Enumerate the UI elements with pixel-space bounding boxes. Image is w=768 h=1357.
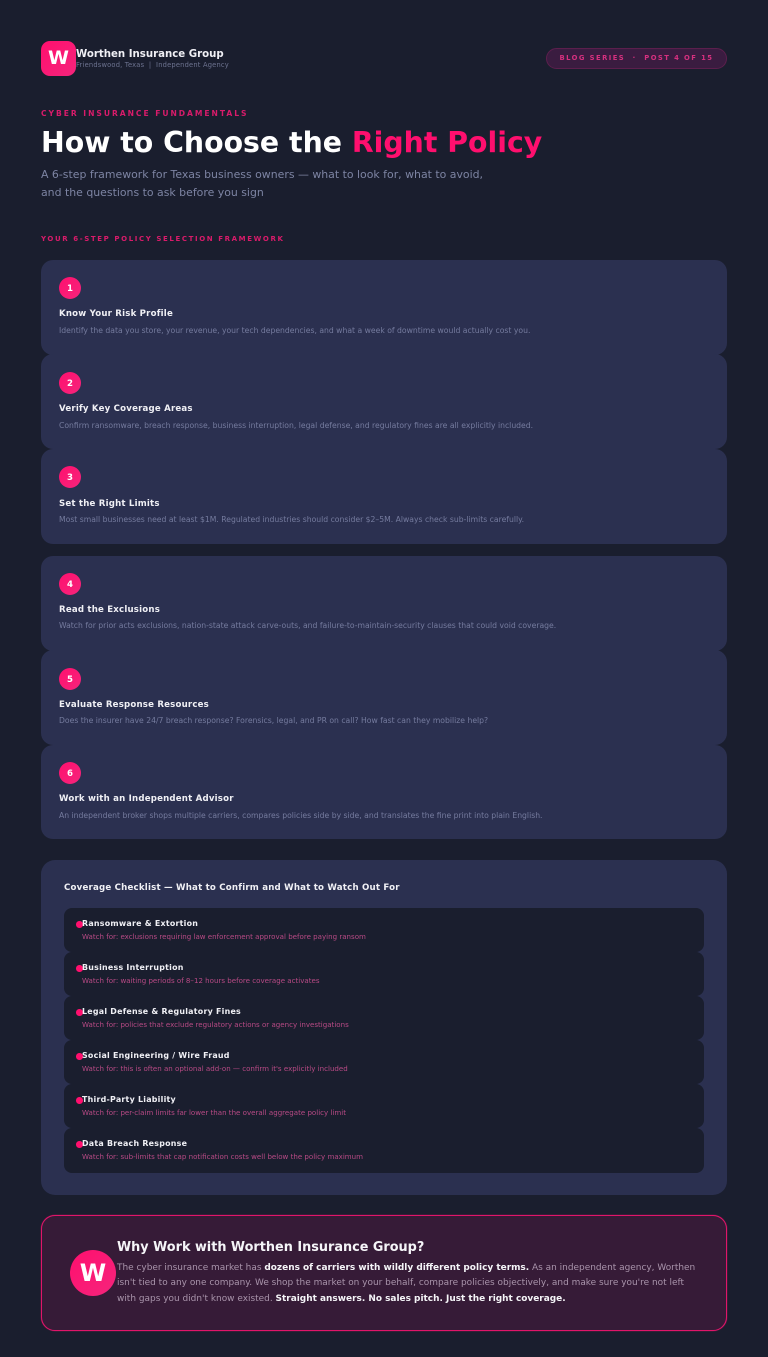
bullet xyxy=(76,965,82,972)
subtitle xyxy=(41,168,483,199)
panel: step 6 xyxy=(41,745,727,839)
callout body xyxy=(117,1263,695,1304)
item title: Ransomware & Extortion xyxy=(82,919,198,928)
bullet xyxy=(76,1053,82,1060)
bullet xyxy=(76,1141,82,1148)
panel: step 1 xyxy=(41,260,727,355)
step number 3: 3 xyxy=(67,473,73,483)
step 2 title: Verify Key Coverage Areas xyxy=(59,404,193,414)
item title: Third-Party Liability xyxy=(82,1095,176,1104)
section label: YOUR 6-STEP POLICY SELECTION FRAMEWORK xyxy=(41,235,284,243)
subtitle: A 6-step framework for Texas business owners — what to look for, what to avoid, xyxy=(41,168,483,181)
step 1 title: Know Your Risk Profile xyxy=(59,309,173,319)
panel: step 5 xyxy=(41,650,727,745)
checklist item: business interruption xyxy=(64,952,704,996)
step 5 description: Does the insurer have 24/7 breach response? Forensics, legal, and PR on call? How fast can they mobilize help? xyxy=(59,716,488,725)
step 4 title: Read the Exclusions xyxy=(59,605,160,615)
checklist item: data breach response xyxy=(64,1128,704,1173)
item note: Watch for: policies that exclude regulatory actions or agency investigations xyxy=(82,1020,349,1029)
step number 4: 4 xyxy=(67,580,73,590)
panel: step 2 xyxy=(41,354,727,449)
step 1 description: Identify the data you store, your revenue, your tech dependencies, and what a week of downtime would actually cost you. xyxy=(59,326,530,335)
header logo xyxy=(41,41,76,76)
step number 1: 1 xyxy=(67,284,73,294)
checklist item: social engineering xyxy=(64,1040,704,1084)
header logo: W xyxy=(48,47,69,69)
step 3 title: Set the Right Limits xyxy=(59,499,160,509)
item note: Watch for: waiting periods of 8–12 hours before coverage activates xyxy=(82,976,320,985)
item title: Business Interruption xyxy=(82,963,184,972)
panel: step 3 xyxy=(41,449,727,544)
eyebrow: CYBER INSURANCE FUNDAMENTALS xyxy=(41,109,248,118)
item note: Watch for: exclusions requiring law enforcement approval before paying ransom xyxy=(82,932,366,941)
step number 5 xyxy=(59,668,81,690)
checklist item: legal defense xyxy=(64,996,704,1040)
item note: Watch for: this is often an optional add-on — confirm it's explicitly included xyxy=(82,1064,348,1073)
item title: Legal Defense & Regulatory Fines xyxy=(82,1007,241,1016)
bullet xyxy=(76,1009,82,1016)
company name: Worthen Insurance Group xyxy=(76,49,224,60)
step number 3 xyxy=(59,466,81,488)
icon: W circle xyxy=(70,1250,116,1296)
callout heading: Why Work with Worthen Insurance Group? xyxy=(117,1240,424,1255)
series badge: BLOG SERIES · POST 4 OF 15 xyxy=(560,54,713,62)
checklist item: ransomware xyxy=(64,908,704,952)
panel: coverage checklist xyxy=(41,860,727,1195)
callout body: with gaps you didn't know existed. Straight answers. No sales pitch. Just the right coverage. xyxy=(117,1294,566,1304)
checklist heading: Coverage Checklist — What to Confirm and What to Watch Out For xyxy=(64,883,400,893)
item title: Data Breach Response xyxy=(82,1139,187,1148)
step number 2 xyxy=(59,372,81,394)
series badge xyxy=(546,48,727,69)
step 2 description: Confirm ransomware, breach response, business interruption, legal defense, and regulatory fines are all explicitly included. xyxy=(59,421,533,430)
step number 5: 5 xyxy=(67,675,73,685)
company location: Friendswood, Texas | Independent Agency xyxy=(76,61,229,69)
panel: why work with Worthen xyxy=(41,1215,727,1331)
step number 4 xyxy=(59,573,81,595)
step number 1 xyxy=(59,277,81,299)
bullet xyxy=(76,921,82,928)
subtitle: and the questions to ask before you sign xyxy=(41,186,264,199)
checklist item: third-party liability xyxy=(64,1084,704,1128)
step number 6: 6 xyxy=(67,769,73,779)
callout body: The cyber insurance market has dozens of carriers with wildly different policy terms. As an independent agency, Worthen xyxy=(117,1263,695,1273)
step 5 title: Evaluate Response Resources xyxy=(59,700,209,710)
panel: step 4 xyxy=(41,556,727,651)
item title: Social Engineering / Wire Fraud xyxy=(82,1051,230,1060)
step 4 description: Watch for prior acts exclusions, nation-state attack carve-outs, and failure-to-maintain-security clauses that could void coverage. xyxy=(59,621,556,630)
callout body: isn't tied to any one company. We shop the market on your behalf, compare policies objectively, and make sure you're not left xyxy=(117,1278,684,1288)
item note: Watch for: sub-limits that cap notification costs well below the policy maximum xyxy=(82,1152,363,1161)
step 3 description: Most small businesses need at least $1M. Regulated industries should consider $2–5M. Always check sub-limits carefully. xyxy=(59,515,524,524)
step 6 description: An independent broker shops multiple carriers, compares policies side by side, and translates the fine print into plain English. xyxy=(59,811,542,820)
step number 6 xyxy=(59,762,81,784)
bullet xyxy=(76,1097,82,1104)
item note: Watch for: per-claim limits far lower than the overall aggregate policy limit xyxy=(82,1108,346,1117)
icon: W circle: W xyxy=(80,1259,106,1287)
step number 2: 2 xyxy=(67,379,73,389)
step 6 title: Work with an Independent Advisor xyxy=(59,794,234,804)
title: How to Choose the Right Policy xyxy=(41,126,542,159)
